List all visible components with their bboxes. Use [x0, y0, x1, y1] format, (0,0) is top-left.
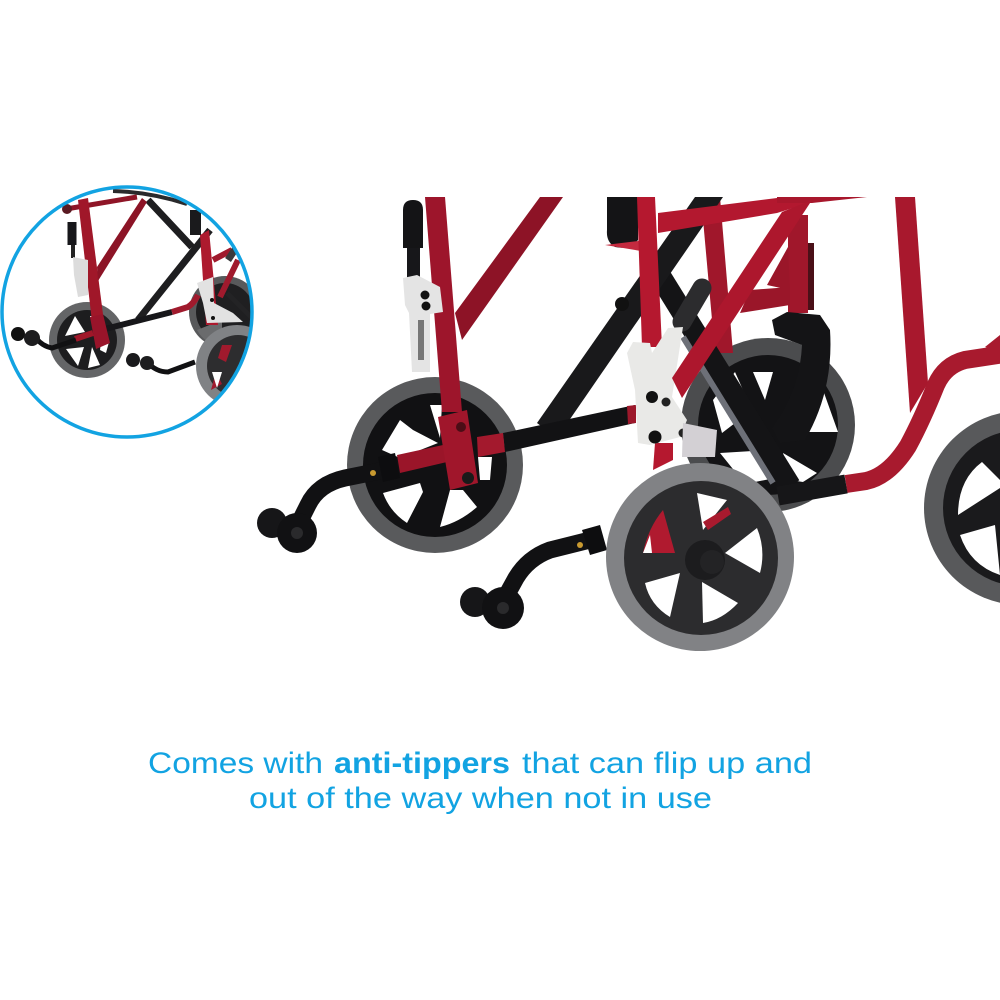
caption line 1: plain start: Comes with — [148, 747, 323, 780]
caption line 2: out of the way when not in use — [249, 782, 712, 815]
inset left anti-tipper — [36, 338, 76, 348]
front diagonal — [672, 200, 812, 398]
front white hinge — [627, 327, 687, 445]
caption — [148, 747, 812, 815]
inset seat edge — [113, 191, 187, 204]
folding brace — [537, 197, 723, 438]
left wheel — [347, 377, 523, 553]
left anti-tipper — [257, 453, 400, 553]
top frame rail — [658, 198, 812, 233]
axle bracket — [438, 410, 478, 490]
caption line 1: plain end: that can flip up and — [522, 747, 812, 780]
inset right hinge — [197, 277, 243, 323]
inset front wheel — [196, 325, 250, 400]
axle bar — [503, 405, 635, 452]
inset rear bar — [105, 312, 172, 329]
inset right red frame — [213, 250, 238, 297]
translucent plastic clip — [682, 423, 717, 457]
left white hinge — [403, 275, 443, 372]
main photo: wheelchair rear with anti-tippers — [257, 197, 1000, 651]
inset left red frame — [66, 197, 137, 209]
black stub to frame — [778, 484, 846, 496]
rear wheel behind — [681, 338, 855, 512]
seat post — [895, 197, 928, 413]
left handle — [403, 200, 423, 248]
front seat handle — [607, 197, 638, 248]
infographic canvas — [0, 185, 1000, 814]
right frame curve — [846, 354, 1000, 484]
front wheel — [606, 463, 794, 651]
rear red uprights — [701, 197, 733, 353]
inset right anti-tipper — [147, 362, 195, 372]
inset black struts — [138, 200, 210, 320]
caption line 1: bold keyword: anti-tippers — [334, 747, 510, 780]
inset circle: alternate view of anti-tippers — [2, 187, 278, 437]
left red upright and diagonal — [425, 197, 462, 412]
inset left wheel — [49, 302, 125, 378]
long black strut behind frame — [655, 268, 790, 486]
inset left handle and hinge — [68, 222, 76, 245]
front handle — [682, 288, 702, 322]
brake fork — [772, 312, 830, 443]
right wheel — [924, 411, 1000, 605]
front red upright — [637, 197, 662, 347]
inset rear wheel behind — [189, 276, 250, 342]
front anti-tipper — [460, 525, 607, 629]
